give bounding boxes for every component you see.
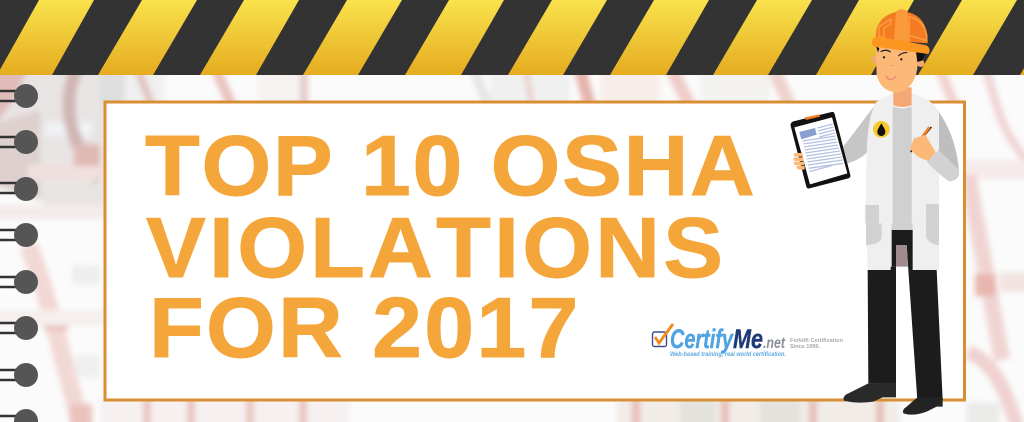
hazard stripe banner — [0, 0, 1024, 75]
bottom strip — [100, 398, 350, 422]
left arm — [843, 105, 875, 163]
left side tones — [0, 60, 110, 215]
title: FOR 2017 — [149, 280, 578, 375]
logo: CertifyMe.net: Me — [733, 324, 763, 354]
logo: CertifyMe.net: Web-based training, real world certification. — [670, 351, 786, 358]
trousers — [868, 267, 896, 383]
spiral binding rings — [0, 84, 38, 422]
right sleeve — [927, 150, 959, 181]
upper body — [791, 9, 959, 223]
right hand — [910, 135, 936, 161]
white title panel with orange border — [105, 102, 964, 400]
lower body — [844, 217, 943, 415]
left hand fingers — [793, 153, 805, 170]
logo: CertifyMe.net: Certify — [670, 324, 734, 354]
icon: hard hat — [872, 9, 930, 54]
coat — [865, 93, 939, 223]
title — [145, 118, 755, 375]
title: VIOLATIONS — [146, 200, 723, 295]
title: TOP 10 OSHA — [145, 118, 755, 213]
clipboard — [791, 112, 850, 188]
head — [872, 46, 926, 93]
icon: checkbox — [652, 324, 673, 346]
right arm — [933, 105, 959, 170]
shoes — [844, 383, 896, 403]
icon: oil drop badge — [873, 121, 890, 138]
logo: CertifyMe.net: .net — [763, 335, 786, 352]
right side — [986, 70, 1024, 170]
logo: CertifyMe.net — [652, 324, 843, 358]
top strip — [100, 70, 125, 106]
logo: CertifyMe.net: Since 1999. — [790, 344, 821, 350]
pen — [911, 127, 931, 152]
logo: CertifyMe.net: Forklift Certification — [790, 338, 843, 344]
neck — [893, 87, 912, 107]
coat lower — [866, 217, 939, 270]
worker character — [791, 9, 959, 415]
